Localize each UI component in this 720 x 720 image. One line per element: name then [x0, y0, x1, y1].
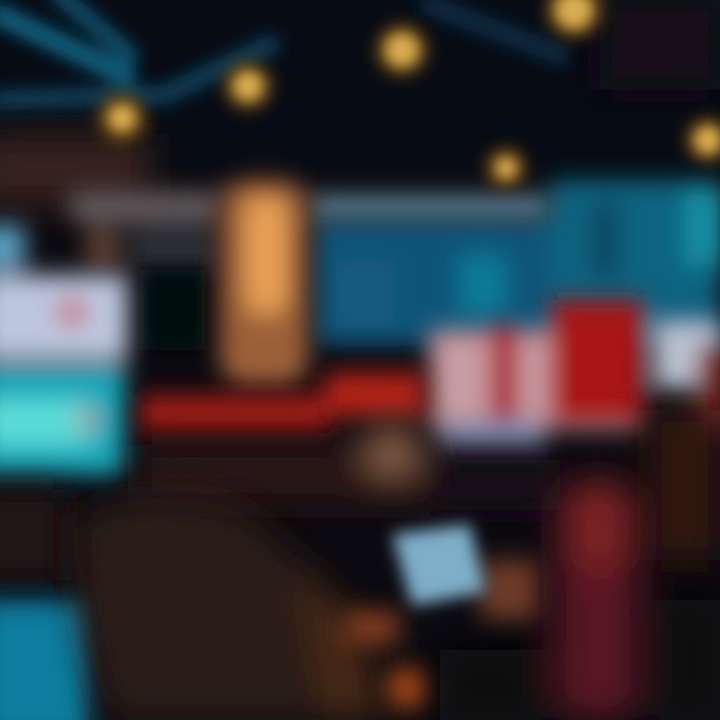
lower cyan floor — [0, 600, 90, 720]
orange hands and table — [345, 560, 540, 710]
tablet — [392, 524, 486, 606]
dark gap beside pillar — [140, 270, 205, 350]
red band — [140, 372, 425, 433]
red foreground person — [440, 480, 720, 720]
ceiling light cores — [109, 0, 720, 178]
brown foreground person — [74, 497, 380, 720]
red and white banners — [430, 300, 720, 450]
audience midground — [0, 410, 720, 580]
grey banner strip — [70, 192, 550, 270]
left screen — [0, 225, 128, 475]
ceiling light halos — [98, 0, 720, 188]
orange pillar — [220, 180, 308, 385]
blue wall — [315, 180, 720, 345]
ceiling with teal beams — [0, 0, 720, 205]
